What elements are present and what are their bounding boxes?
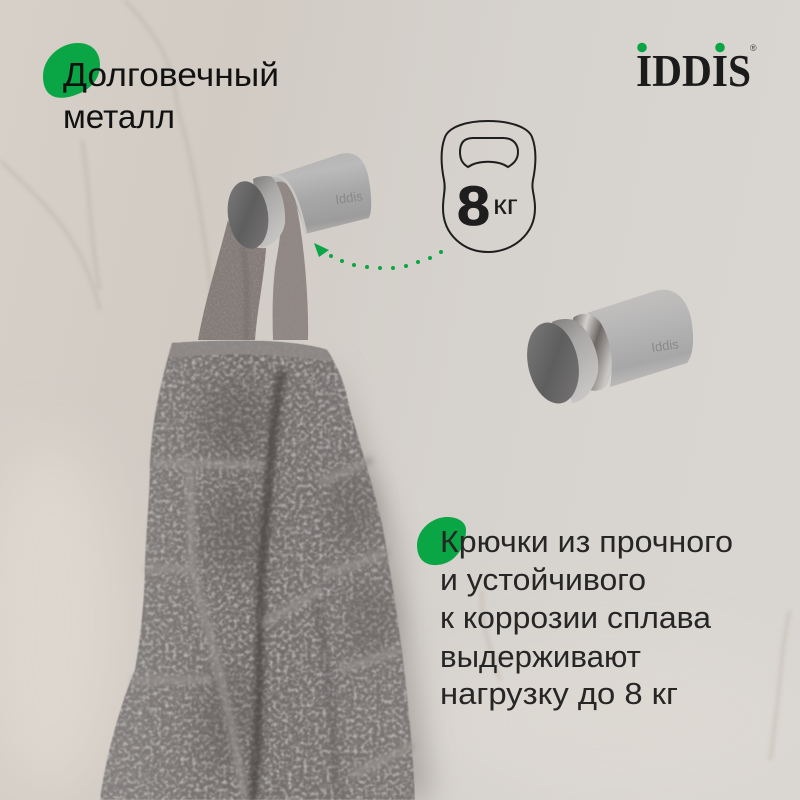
kettlebell handle opening bbox=[460, 138, 518, 167]
towel body bbox=[100, 341, 415, 800]
heading: durable metal bbox=[43, 43, 279, 135]
hook cap face bbox=[223, 179, 273, 251]
front towel loop bbox=[198, 220, 266, 340]
towel dark patches bbox=[200, 380, 390, 770]
logo green dots bbox=[637, 43, 725, 52]
logo: IDDIS bbox=[636, 43, 757, 96]
green blob behind description bbox=[417, 517, 466, 565]
hook cap rim bbox=[552, 319, 598, 403]
description text: нагрузку до 8 кг bbox=[440, 676, 678, 711]
towel bbox=[100, 341, 415, 800]
description block bbox=[417, 517, 733, 711]
weight unit: кг bbox=[493, 189, 518, 220]
hook barrel bbox=[268, 153, 371, 234]
hook cap rim bbox=[253, 176, 285, 248]
icon: kettlebell 8 kg bbox=[442, 121, 536, 252]
hook with towel loop bbox=[198, 153, 371, 340]
brand mark on barrel: Iddis bbox=[334, 188, 364, 207]
logo wordmark: IDDIS bbox=[636, 45, 751, 96]
towel hem bbox=[170, 341, 332, 362]
green blob behind heading bbox=[43, 43, 100, 98]
heading text: Долговечный bbox=[63, 56, 279, 93]
towel raised ribs bbox=[132, 460, 413, 800]
towel deep shadow right fold bbox=[318, 600, 338, 800]
hook neck bbox=[573, 314, 612, 391]
description text: Крючки из прочного bbox=[440, 524, 733, 559]
description text: к коррозии сплава bbox=[440, 600, 712, 635]
shadow: towel on wall bbox=[330, 350, 432, 800]
registered mark: ® bbox=[750, 43, 757, 53]
description text: выдерживают bbox=[440, 639, 641, 674]
weight number: 8 bbox=[457, 174, 490, 237]
heading text: металл bbox=[63, 98, 175, 135]
hook barrel bbox=[587, 290, 693, 387]
barrel edge ring bbox=[268, 176, 306, 234]
description text: и устойчивого bbox=[440, 562, 646, 597]
towel central fold bbox=[252, 370, 282, 800]
back towel loop bbox=[272, 182, 308, 340]
hook without towel bbox=[520, 290, 693, 408]
brand mark on barrel: Iddis bbox=[650, 336, 680, 355]
arrow: dotted green pointing to hook bbox=[314, 243, 443, 270]
kettlebell outline bbox=[442, 121, 536, 252]
hook cap face bbox=[520, 318, 586, 408]
loop crease bbox=[243, 248, 247, 340]
